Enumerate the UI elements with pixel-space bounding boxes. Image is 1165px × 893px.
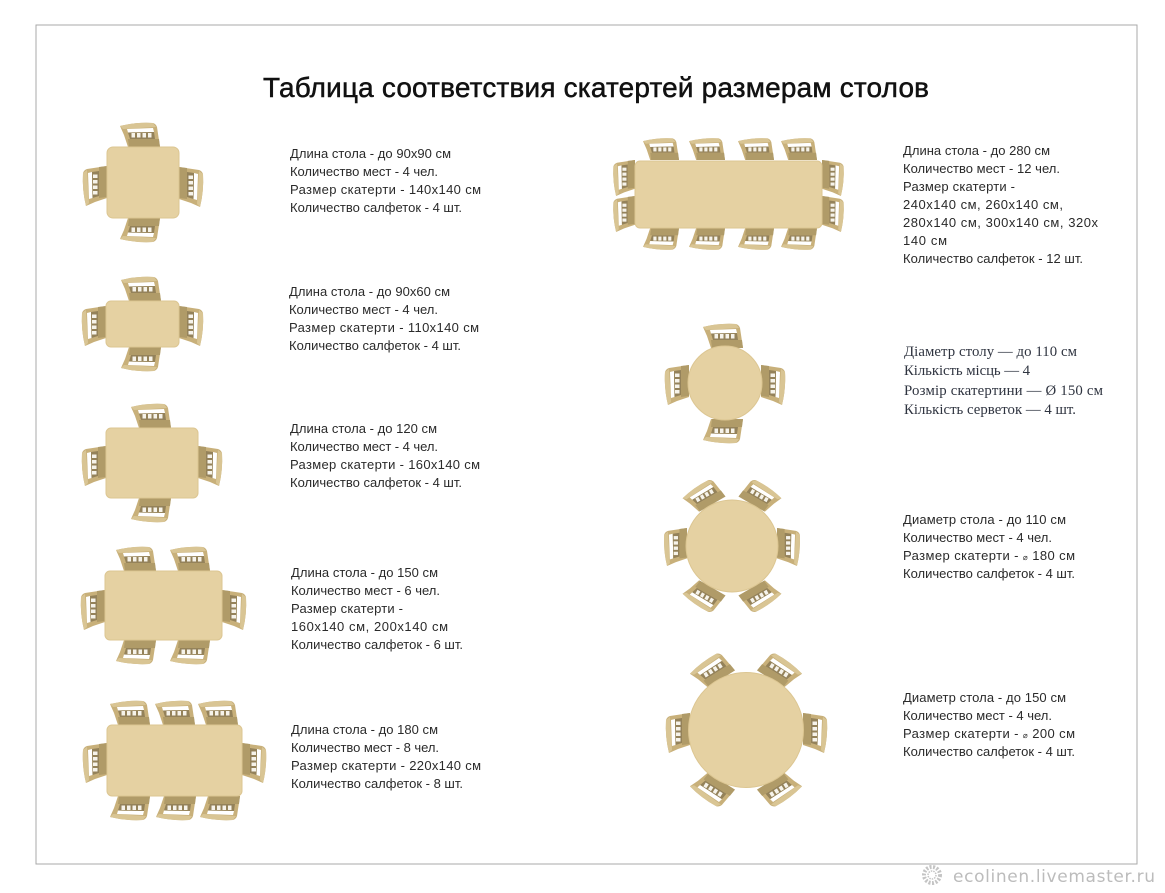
table diagram: rectangle 150, 6 seats [81, 547, 246, 664]
text block: round table up to 110, Ukrainian: Кількість серветок — 4 шт. [904, 402, 1076, 418]
text block: round table up to 110: Размер скатерти - ⌀ 180 см [903, 548, 1075, 563]
table diagram: round 110, 6 seats [664, 477, 800, 615]
table diagram: round 150, 6 seats [666, 650, 827, 810]
text block: round table up to 110, Ukrainian: Кількість місць — 4 [904, 363, 1031, 379]
text block: table up to 90x90: Количество мест - 4 чел. [290, 164, 438, 179]
title: Таблица соответствия скатертей размерам столов [263, 72, 929, 103]
text block: round table up to 150 [903, 690, 1075, 759]
text block: table up to 280: Количество мест - 12 чел. [903, 161, 1060, 176]
text block: table up to 180 [291, 722, 481, 791]
text block: table up to 120: Количество салфеток - 4 шт. [290, 475, 462, 490]
text block: table up to 90x60: Длина стола - до 90х60 см [289, 284, 450, 299]
text block: table up to 180: Размер скатерти - 220х140 см [291, 758, 481, 773]
text block: round table up to 110: Количество салфеток - 4 шт. [903, 566, 1075, 581]
text block: round table up to 150: Диаметр стола - до 150 см [903, 690, 1066, 705]
table diagram: square 90x90, 4 seats [83, 123, 203, 242]
text block: round table up to 150: Количество мест - 4 чел. [903, 708, 1052, 723]
text block: table up to 150: Количество мест - 6 чел. [291, 583, 440, 598]
text block: table up to 180: Количество мест - 8 чел. [291, 740, 439, 755]
text block: round table up to 150: Количество салфеток - 4 шт. [903, 744, 1075, 759]
text block: table up to 90x90: Количество салфеток - 4 шт. [290, 200, 462, 215]
text block: table up to 150 [291, 565, 463, 652]
text block: table up to 90x60 [289, 284, 479, 353]
text block: round table up to 110, Ukrainian: Розмір скатертини — Ø 150 см [904, 383, 1104, 399]
text block: table up to 150: Размер скатерти - [291, 601, 403, 616]
text block: table up to 280: 240х140 см, 260х140 см, [903, 197, 1063, 212]
text block: table up to 280: Длина стола - до 280 см [903, 143, 1050, 158]
text block: round table up to 110, Ukrainian: Діаметр столу — до 110 см [904, 344, 1078, 360]
table diagram: round 110, 4 seats [665, 324, 785, 443]
table diagram: rectangle 280, 12 seats [613, 138, 844, 250]
text block: table up to 90x90: Размер скатерти - 140х140 см [290, 182, 481, 197]
watermark text: ecolinen.livemaster.ru [953, 867, 1155, 887]
text block: table up to 120 [290, 421, 480, 490]
text block: table up to 280: 280х140 см, 300х140 см, 320х [903, 215, 1098, 230]
table diagram: rectangle 180, 8 seats [83, 701, 266, 820]
text block: table up to 90x90: Длина стола - до 90х90 см [290, 146, 451, 161]
text block: table up to 180: Длина стола - до 180 см [291, 722, 438, 737]
icon: watermark gear [924, 867, 940, 883]
text block: table up to 150: 160х140 см, 200х140 см [291, 619, 448, 634]
text block: table up to 150: Длина стола - до 150 см [291, 565, 438, 580]
text block: round table up to 110, Ukrainian [904, 344, 1104, 418]
text block: table up to 120: Размер скатерти - 160х140 см [290, 457, 480, 472]
text block: table up to 90x60: Размер скатерти - 110х140 см [289, 320, 479, 335]
text block: round table up to 110 [903, 512, 1075, 581]
text block: table up to 280: 140 см [903, 233, 947, 248]
text block: round table up to 110: Количество мест - 4 чел. [903, 530, 1052, 545]
text block: round table up to 150: Размер скатерти - ⌀ 200 см [903, 726, 1075, 741]
table diagram: rectangle 120, 4 seats [82, 404, 222, 522]
text block: table up to 90x90 [290, 146, 481, 215]
table diagram: rectangle 90x60, 4 seats [82, 277, 203, 371]
text block: table up to 120: Количество мест - 4 чел. [290, 439, 438, 454]
text block: table up to 280: Количество салфеток - 12 шт. [903, 251, 1083, 266]
text block: table up to 90x60: Количество мест - 4 чел. [289, 302, 438, 317]
text block: table up to 180: Количество салфеток - 8 шт. [291, 776, 463, 791]
text block: table up to 280: Размер скатерти - [903, 179, 1015, 194]
text block: round table up to 110: Диаметр стола - до 110 см [903, 512, 1066, 527]
text block: table up to 120: Длина стола - до 120 см [290, 421, 437, 436]
text block: table up to 150: Количество салфеток - 6 шт. [291, 637, 463, 652]
text block: table up to 90x60: Количество салфеток - 4 шт. [289, 338, 461, 353]
text block: table up to 280 [903, 143, 1098, 266]
